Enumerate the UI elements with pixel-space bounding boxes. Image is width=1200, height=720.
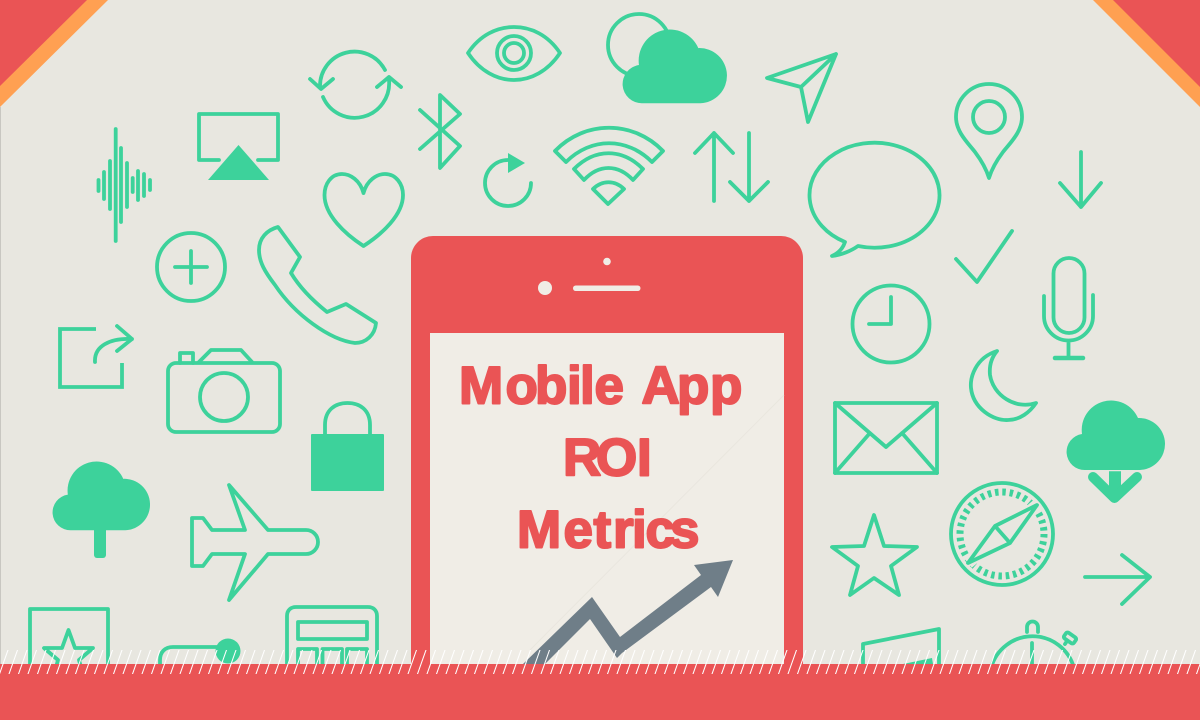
icon: envelope bbox=[835, 403, 937, 473]
icon: map pin bbox=[956, 84, 1022, 178]
icon: crescent moon bbox=[971, 351, 1036, 420]
icon: heart bbox=[324, 174, 403, 246]
icon: right arrow bbox=[1085, 555, 1150, 604]
phone sensor bbox=[603, 258, 611, 265]
icon: wifi bbox=[555, 128, 663, 204]
icon: sound waveform bbox=[98, 129, 150, 241]
phone body bbox=[411, 236, 803, 700]
title bbox=[459, 356, 742, 560]
growth arrow bbox=[523, 560, 733, 664]
icon: airplane bbox=[192, 485, 318, 600]
icon: stopwatch bbox=[991, 622, 1077, 668]
icon: check mark bbox=[956, 231, 1012, 282]
icon: refresh bbox=[485, 153, 531, 206]
icon: up and down arrows bbox=[695, 133, 768, 201]
phone speaker bbox=[573, 286, 640, 291]
title: Metrics bbox=[517, 500, 699, 560]
icon: down arrow bbox=[1060, 152, 1101, 207]
icon: moon and cloud bbox=[608, 14, 727, 103]
icon: camera bbox=[168, 350, 280, 432]
icon: star bbox=[832, 515, 917, 595]
title: ROI bbox=[563, 428, 652, 488]
icon: eye bbox=[468, 27, 560, 80]
icon: airplay bbox=[199, 114, 278, 180]
corner ribbon: top left bbox=[0, 0, 108, 107]
title: Mobile App bbox=[459, 356, 742, 416]
icon: calculator bbox=[287, 607, 377, 670]
icon: paper plane bbox=[767, 54, 836, 122]
bottom band bbox=[0, 664, 1200, 720]
icon: tablet bbox=[863, 629, 939, 670]
icon: cloud tree bbox=[53, 461, 150, 558]
icon: microphone bbox=[1044, 258, 1093, 358]
screen sheen bbox=[530, 395, 784, 650]
icon: cloud download bbox=[1066, 400, 1165, 498]
icon: plus circle bbox=[157, 233, 225, 301]
icon: speech bubble bbox=[810, 143, 940, 256]
icon: starred box bbox=[30, 609, 108, 678]
icon: clock bbox=[852, 286, 930, 362]
icon: bluetooth bbox=[420, 95, 460, 168]
phone screen bbox=[430, 333, 784, 673]
icon: compass bbox=[951, 483, 1053, 585]
phone bbox=[411, 236, 803, 700]
icon: toggle switch bbox=[160, 638, 240, 670]
icon: telephone handset bbox=[259, 227, 376, 343]
icon: share bbox=[60, 326, 132, 387]
corner ribbon: top right bbox=[1093, 0, 1200, 107]
icon: sync arrows bbox=[310, 52, 401, 118]
hatched stitching bbox=[0, 650, 1200, 674]
icon: padlock bbox=[311, 403, 384, 491]
phone camera bbox=[538, 281, 552, 295]
